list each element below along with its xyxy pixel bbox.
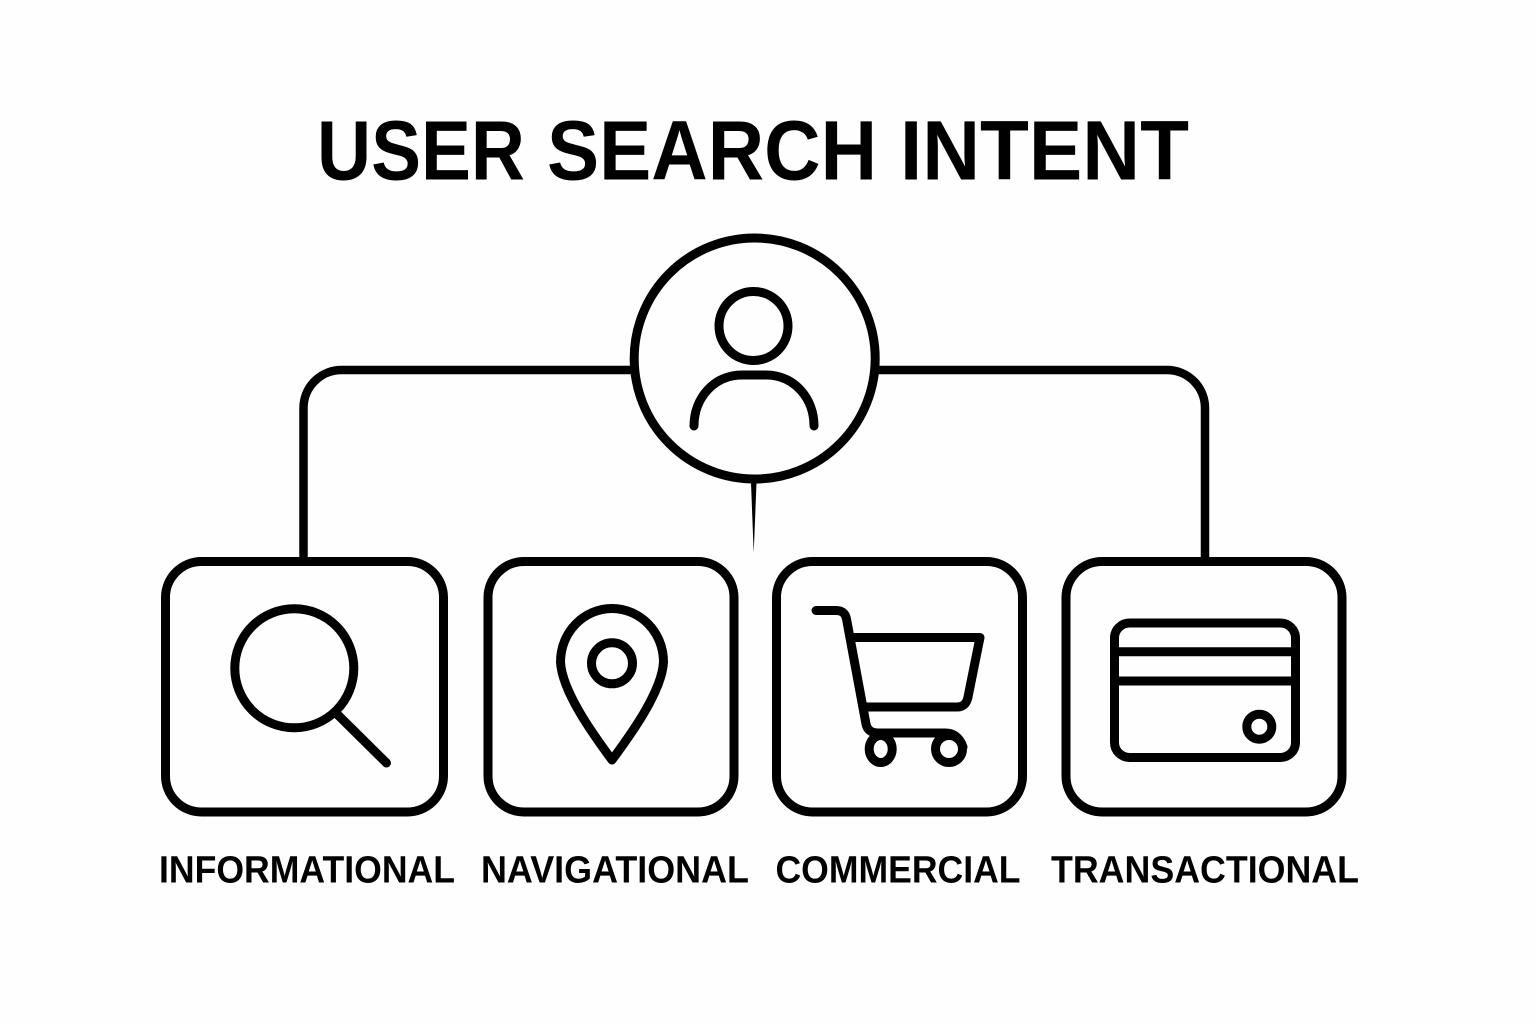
- label: navigational: NAVIGATIONAL: [481, 850, 749, 892]
- label: commercial: COMMERCIAL: [776, 850, 1020, 892]
- panel: commercial: [776, 562, 1022, 812]
- icon: magnifying glass: [235, 609, 386, 763]
- icon: shopping cart: [816, 610, 980, 762]
- user circle icon: [634, 238, 875, 479]
- title: INTENT: [900, 104, 1189, 198]
- title: SEARCH: [547, 104, 877, 198]
- panel: informational: [166, 562, 444, 812]
- label: informational: INFORMATIONAL: [159, 850, 455, 892]
- title: [317, 104, 1189, 198]
- icon: credit card: [1114, 623, 1296, 758]
- center pointer: [751, 483, 756, 553]
- icon: map pin: [560, 608, 664, 760]
- connector lines: [304, 370, 1205, 558]
- label: transactional: TRANSACTIONAL: [1051, 850, 1359, 892]
- panel: transactional: [1066, 562, 1342, 812]
- panel: navigational: [488, 562, 734, 812]
- title: USER: [317, 104, 525, 198]
